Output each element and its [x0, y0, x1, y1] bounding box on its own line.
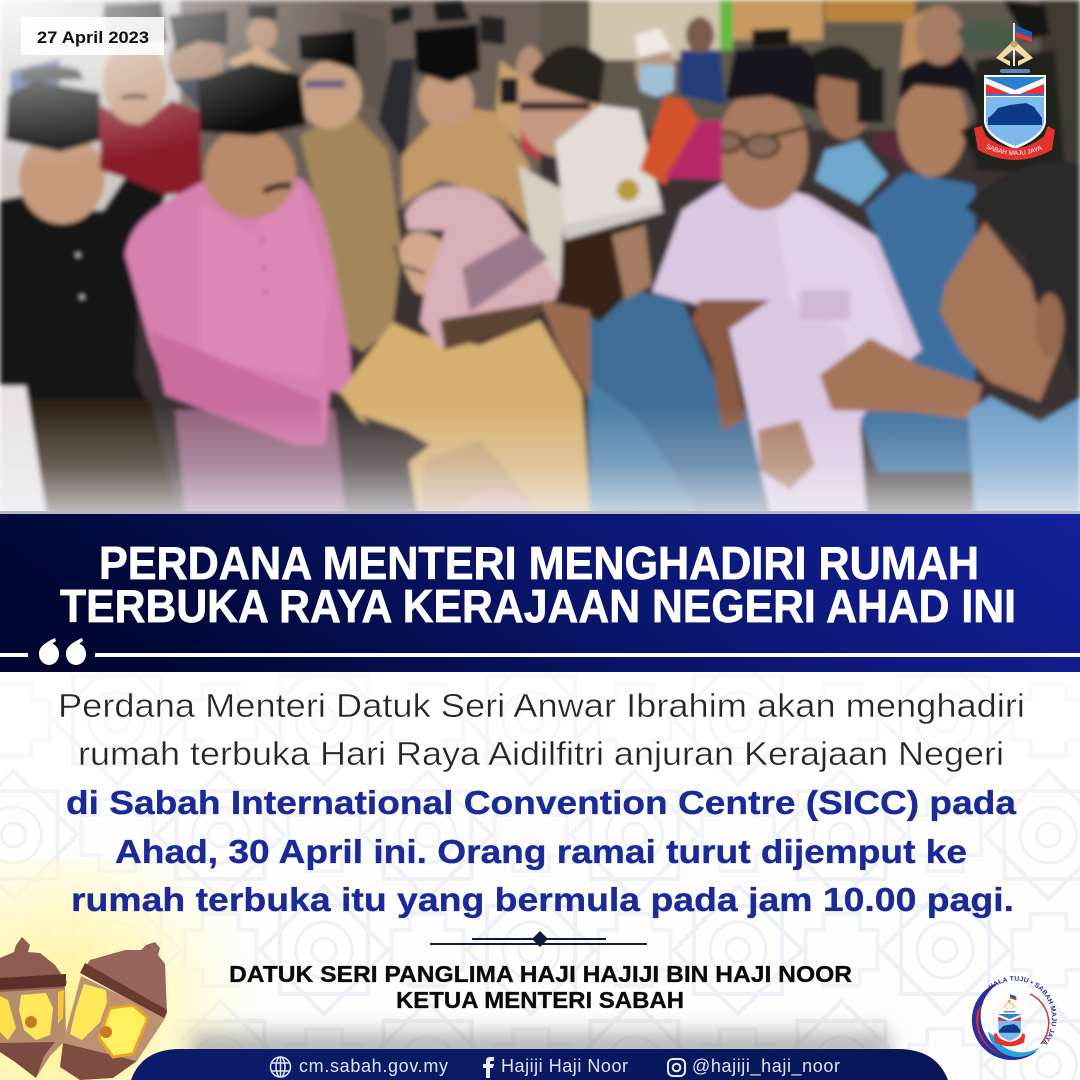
icon: instagram	[668, 1059, 685, 1076]
right side blue shirt men	[635, 0, 1065, 472]
red shirt man	[100, 1, 202, 195]
title text: PERDANA MENTERI MENGHADIRI RUMAH	[99, 537, 979, 589]
Anwar in lilac baju	[652, 45, 922, 514]
black shirt man	[0, 65, 178, 514]
photo collage: leaders greeting the crowd	[0, 0, 1080, 515]
foreground man	[820, 161, 1080, 514]
Hala Tuju logo	[972, 976, 1057, 1060]
icon: Sabah state crest	[974, 23, 1055, 160]
quote rule	[0, 653, 1080, 657]
tan shirt man	[402, 24, 530, 226]
back crowd left	[10, 0, 545, 165]
blue shirt elder from behind	[540, 205, 765, 514]
footer bar	[131, 1022, 948, 1080]
highlighted blue text	[66, 785, 1016, 919]
lantern glow	[0, 860, 275, 1080]
icon: quotation marks	[39, 638, 86, 665]
right lantern	[60, 942, 167, 1080]
Hala Tuju logo: HALA TUJU • SABAH MAJU JAYA	[988, 976, 1057, 1044]
title text: TERBUKA RAYA KERAJAAN NEGERI AHAD INI	[60, 580, 1016, 632]
white cap man	[518, 46, 662, 300]
date label: 27 April 2023	[37, 28, 149, 47]
highlighted blue text: rumah terbuka itu yang bermula pada jam 10.00 pagi.	[71, 882, 1014, 919]
left lantern	[0, 937, 67, 1078]
date label	[21, 17, 164, 55]
icon: globe	[270, 1057, 290, 1077]
body text	[58, 688, 1025, 919]
pink baju man	[125, 62, 352, 514]
highlighted blue text: Ahad, 30 April ini. Orang ramai turut dijemput ke	[115, 834, 967, 871]
signatory name: KETUA MENTERI SABAH	[396, 987, 684, 1013]
icon: Sabah state crest: SABAH MAJU JAYA	[986, 144, 1042, 155]
title text	[60, 537, 1016, 632]
signatory name: DATUK SERI PANGLIMA HAJI HAJIJI BIN HAJI NOOR	[229, 961, 852, 987]
background pattern panel	[0, 672, 1080, 1080]
signatory name	[229, 961, 852, 1013]
website: cm.sabah.gov.my	[299, 1056, 448, 1076]
lanterns	[0, 937, 167, 1080]
icon: facebook	[483, 1057, 494, 1078]
title banner	[0, 514, 1080, 672]
hijab woman in yellow	[340, 187, 590, 514]
batik shirt man	[298, 30, 402, 352]
highlighted blue text: di Sabah International Convention Centre (SICC) pada	[66, 785, 1016, 822]
ornamental divider	[430, 931, 647, 947]
instagram handle: @hajiji_haji_noor	[692, 1056, 840, 1077]
facebook name: Hajiji Haji Noor	[501, 1056, 628, 1076]
body text: rumah terbuka Hari Raya Aidilfitri anjuran Kerajaan Negeri	[78, 736, 1004, 773]
body text: Perdana Menteri Datuk Seri Anwar Ibrahim akan menghadiri	[58, 688, 1025, 725]
